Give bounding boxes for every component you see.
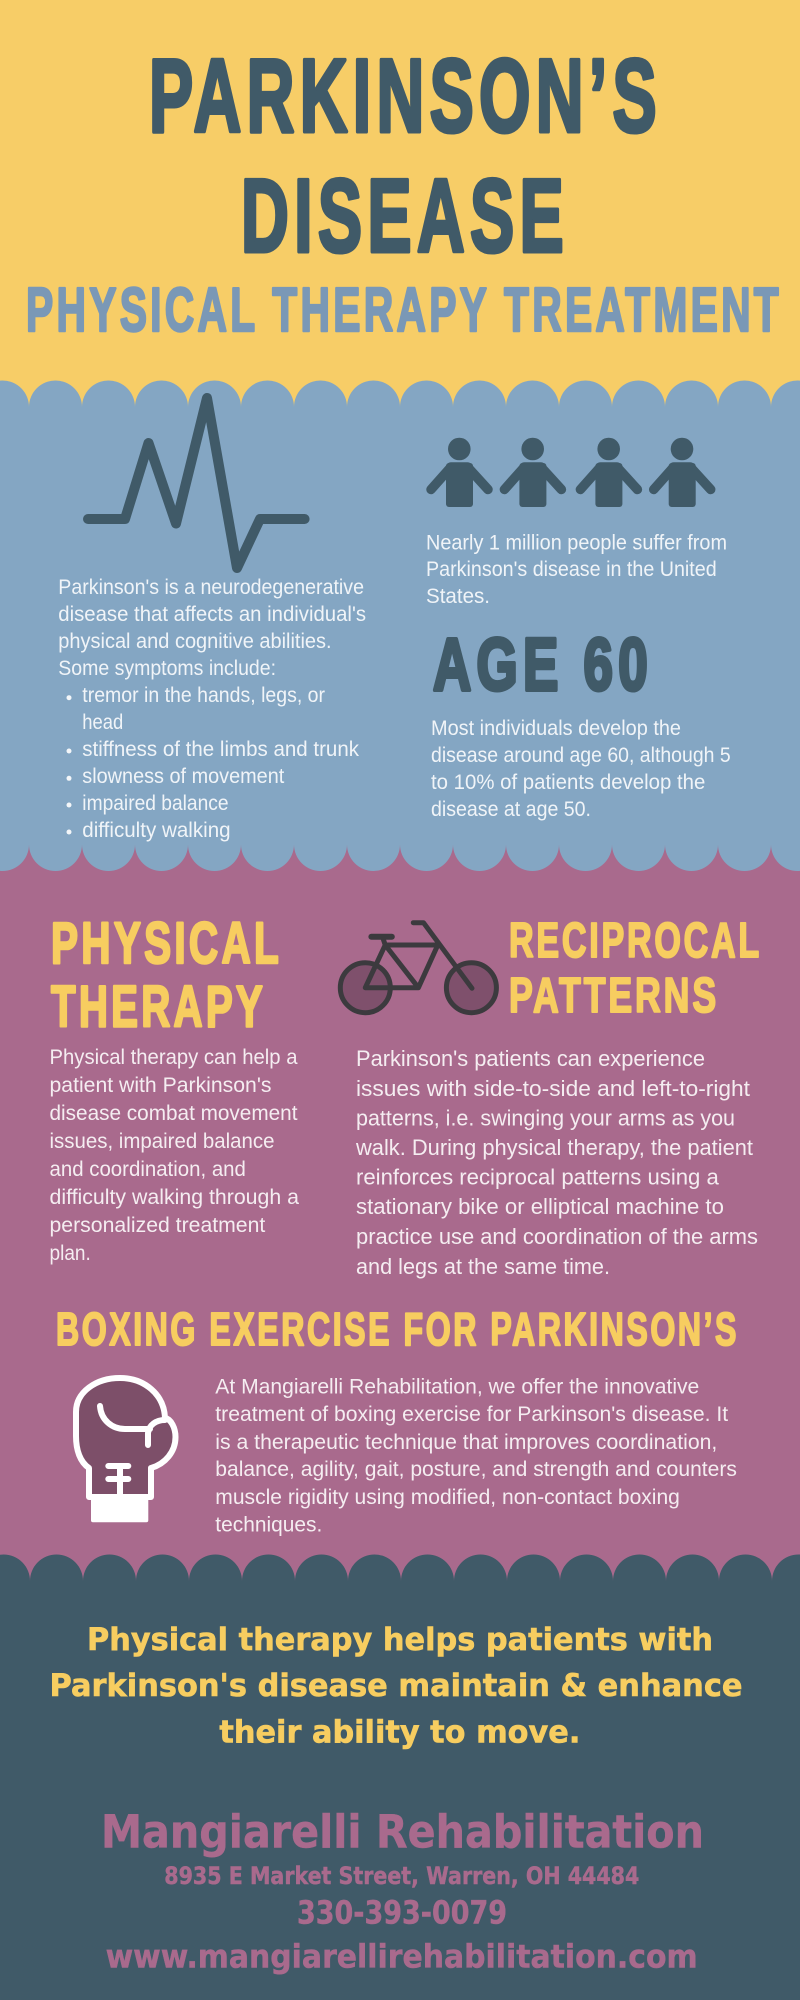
text: one million people: States. <box>426 585 490 608</box>
panel: closing and contact <box>0 1554 800 2000</box>
text: boxing description: techniques. <box>215 1514 322 1537</box>
text: physical therapy description: plan. <box>50 1242 91 1265</box>
text: one million people <box>426 531 727 608</box>
text: reciprocal patterns description: practice use and coordination of the arms <box>356 1224 758 1249</box>
panel: title header <box>0 0 800 420</box>
heading: physical therapy: PHYSICAL <box>51 911 282 976</box>
text: reciprocal patterns description: walk. During physical therapy, the patient <box>355 1135 753 1160</box>
heading: physical therapy: THERAPY <box>51 975 266 1040</box>
icon: boxing glove <box>76 1378 176 1522</box>
text: boxing description <box>215 1375 737 1537</box>
text: Parkinson's overview with symptoms list: Parkinson's is a neurodegenerative <box>58 576 364 599</box>
text: physical therapy description <box>50 1046 299 1265</box>
text: Parkinson's overview with symptoms list: disease that affects an individual's <box>58 603 366 626</box>
text: physical therapy description: patient with Parkinson's <box>50 1074 272 1097</box>
heading: physical therapy <box>51 911 282 1040</box>
heading: reciprocal patterns <box>509 914 762 1023</box>
text: physical therapy description: difficulty walking through a <box>50 1186 299 1209</box>
text: physical therapy description: and coordination, and <box>50 1158 246 1181</box>
text: age of onset <box>431 717 731 821</box>
text: age of onset: Most individuals develop the <box>431 717 681 740</box>
callout: closing statement: Physical therapy helps patients with <box>87 1622 713 1658</box>
text: boxing description: treatment of boxing exercise for Parkinson's disease. It <box>215 1403 728 1426</box>
text: boxing description: is a therapeutic technique that improves coordination, <box>215 1431 717 1454</box>
text: reciprocal patterns description <box>355 1046 758 1279</box>
icon: heartbeat line <box>88 398 305 568</box>
callout: closing statement: their ability to move. <box>219 1714 580 1750</box>
text: physical therapy description: Physical therapy can help a <box>50 1046 298 1069</box>
text: boxing description: At Mangiarelli Rehabilitation, we offer the innovative <box>215 1375 699 1398</box>
text: reciprocal patterns description: stationary bike or elliptical machine to <box>356 1194 724 1219</box>
text: reciprocal patterns description: reinforces reciprocal patterns using a <box>356 1165 720 1190</box>
text: Parkinson's overview with symptoms list: Some symptoms include: <box>58 657 276 680</box>
text: physical therapy description: personalized treatment <box>50 1214 265 1237</box>
text: age of onset: to 10% of patients develop the <box>431 771 705 794</box>
text: age of onset: disease around age 60, although 5 <box>431 744 731 767</box>
text: Parkinson's overview with symptoms list: stiffness of the limbs and trunk <box>82 738 359 761</box>
text: physical therapy description: issues, impaired balance <box>50 1130 274 1153</box>
text: boxing description: muscle rigidity using modified, non-contact boxing <box>215 1486 680 1509</box>
contact details: www.mangiarellirehabilitation.com <box>106 1937 698 1975</box>
text: Parkinson's overview with symptoms list: difficulty walking <box>82 819 231 842</box>
callout: closing statement: Parkinson's disease maintain & enhance <box>50 1668 742 1704</box>
text: age of onset: disease at age 50. <box>431 798 591 821</box>
heading: reciprocal patterns: PATTERNS <box>509 969 719 1023</box>
contact details <box>101 1806 704 1975</box>
text: physical therapy description: disease combat movement <box>50 1102 298 1125</box>
contact details: Mangiarelli Rehabilitation <box>101 1806 704 1859</box>
text: Parkinson's overview with symptoms list: head <box>82 711 123 734</box>
text: reciprocal patterns description: Parkinson's patients can experience <box>356 1046 705 1071</box>
title <box>149 38 662 274</box>
heading: age 60: AGE 60 <box>433 623 653 706</box>
text: boxing description: balance, agility, gait, posture, and strength and counters <box>215 1458 737 1481</box>
text: Parkinson's overview with symptoms list: slowness of movement <box>82 765 284 788</box>
panel: overview facts <box>0 380 800 871</box>
panel: physical therapy and boxing <box>0 845 800 1585</box>
text: reciprocal patterns description: and legs at the same time. <box>356 1254 610 1279</box>
contact details: 330-393-0079 <box>297 1893 507 1931</box>
icon: bicycle <box>340 923 496 1013</box>
text: reciprocal patterns description: patterns, i.e. swinging your arms as you <box>356 1105 735 1130</box>
text: Parkinson's overview with symptoms list: impaired balance <box>82 792 229 815</box>
text: Parkinson's overview with symptoms list: tremor in the hands, legs, or <box>82 684 325 707</box>
icon: four people <box>431 438 711 507</box>
text: one million people: Nearly 1 million people suffer from <box>426 531 727 554</box>
callout: closing statement <box>50 1622 742 1750</box>
contact details: 8935 E Market Street, Warren, OH 44484 <box>164 1862 639 1890</box>
text: Parkinson's overview with symptoms list <box>58 576 366 842</box>
text: reciprocal patterns description: issues with side-to-side and left-to-right <box>356 1076 750 1101</box>
text: Parkinson's overview with symptoms list: physical and cognitive abilities. <box>58 630 332 653</box>
text: one million people: Parkinson's disease in the United <box>426 558 717 581</box>
title: DISEASE <box>241 158 569 274</box>
